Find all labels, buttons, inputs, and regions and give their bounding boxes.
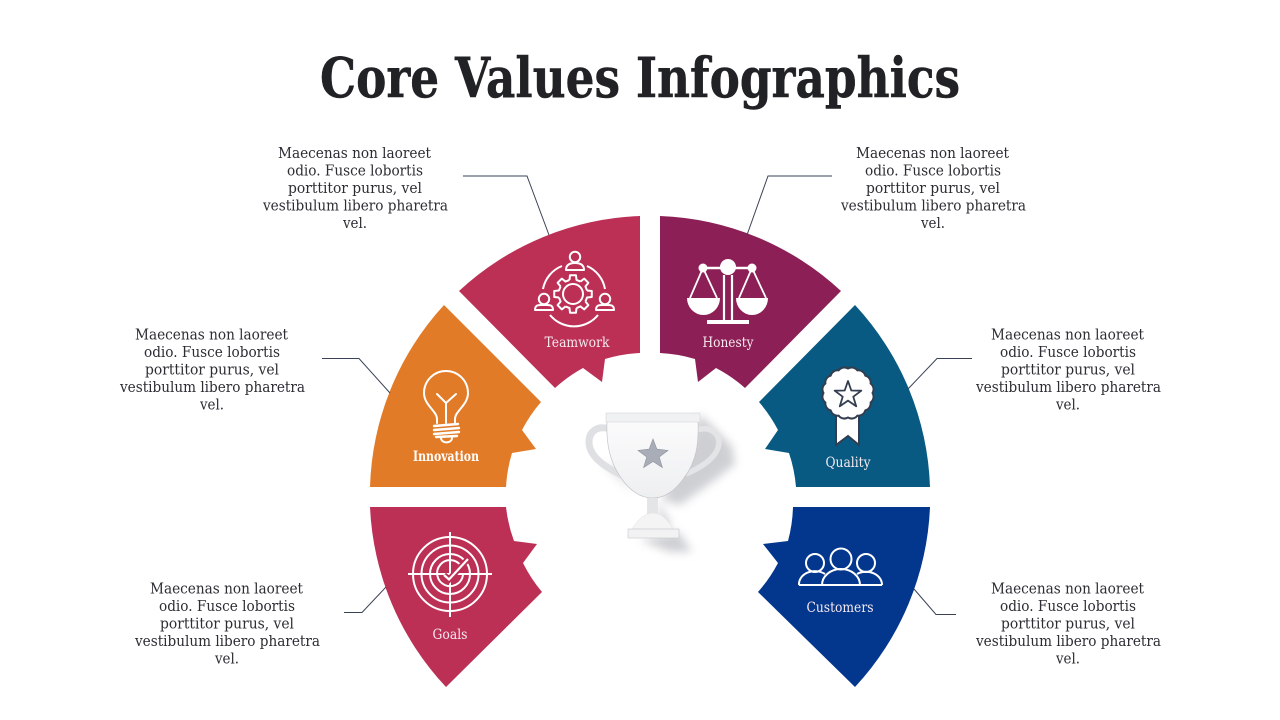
text block: Goals: vel. [214, 650, 239, 668]
text block: Quality: vestibulum libero pharetra [975, 378, 1161, 396]
icon: light bulb [424, 371, 468, 442]
text block: Honesty: vestibulum libero pharetra [840, 196, 1026, 214]
trophy rim [606, 413, 700, 422]
panel: Quality [759, 305, 930, 487]
trophy stem [647, 498, 658, 515]
label: Quality: Quality [826, 455, 871, 471]
label: Innovation: Innovation [413, 449, 479, 465]
text block: Innovation: Maecenas non laoreet [135, 326, 288, 344]
text block: Goals: vestibulum libero pharetra [134, 632, 320, 650]
text block: Honesty: Maecenas non laoreet [856, 144, 1009, 162]
panel: Goals [370, 507, 542, 687]
text block: Quality: vel. [1055, 396, 1080, 414]
trophy shadow [600, 414, 735, 552]
segment: Honesty [660, 216, 841, 388]
leader: Honesty [747, 176, 832, 235]
text block: Customers: porttitor purus, vel [1001, 614, 1135, 632]
text block: Innovation: vel. [199, 396, 224, 414]
leader: Goals [344, 587, 386, 612]
label: Teamwork: Teamwork [544, 335, 610, 351]
label: Honesty: Honesty [702, 335, 754, 351]
trophy plate [628, 529, 679, 538]
trophy cup [607, 421, 698, 498]
icon: trophy [589, 413, 735, 552]
panel: Innovation [370, 305, 541, 487]
panel: Honesty [660, 216, 841, 388]
title: Core Values Infographics [320, 45, 960, 110]
text block: Teamwork: porttitor purus, vel [288, 179, 422, 197]
text block: Goals: Maecenas non laoreet [150, 580, 303, 598]
text block: Quality: Maecenas non laoreet [991, 326, 1144, 344]
label: Goals: Goals [432, 627, 468, 643]
leader: Customers [914, 589, 956, 614]
text block: Innovation: odio. Fusce lobortis [144, 343, 280, 361]
segment: Customers [758, 507, 930, 687]
panel: Teamwork [459, 216, 640, 388]
text block: Quality [975, 326, 1161, 414]
text block: Customers: Maecenas non laoreet [991, 580, 1144, 598]
text block: Teamwork: vestibulum libero pharetra [262, 196, 448, 214]
icon: scales [687, 259, 768, 324]
text block: Customers [975, 580, 1161, 668]
text block: Honesty: vel. [920, 214, 945, 232]
text block: Goals: odio. Fusce lobortis [159, 597, 295, 615]
text block: Innovation: porttitor purus, vel [145, 360, 279, 378]
text block: Teamwork: vel. [342, 214, 367, 232]
text block: Goals [134, 580, 320, 668]
text block: Innovation [119, 326, 305, 414]
panel: Customers [758, 507, 930, 687]
text block: Honesty: porttitor purus, vel [866, 179, 1000, 197]
text block: Quality: odio. Fusce lobortis [1000, 343, 1136, 361]
trophy handles [589, 428, 624, 476]
segment: Innovation [370, 305, 541, 487]
text block: Customers: vel. [1055, 650, 1080, 668]
text block: Honesty: odio. Fusce lobortis [865, 162, 1001, 180]
trophy base [632, 513, 673, 529]
text block: Innovation: vestibulum libero pharetra [119, 378, 305, 396]
text block: Teamwork: odio. Fusce lobortis [287, 162, 423, 180]
icon: target with check [408, 532, 492, 617]
leader: Teamwork [463, 176, 549, 235]
icon: teamwork gear and people [535, 252, 614, 326]
icon: people group [799, 548, 882, 585]
text block: Teamwork [262, 144, 448, 232]
text block: Customers: vestibulum libero pharetra [975, 632, 1161, 650]
leader: Quality [908, 358, 972, 389]
segment: Goals [370, 507, 542, 687]
segment: Quality [759, 305, 930, 487]
leader: Innovation [322, 358, 390, 393]
text block: Goals: porttitor purus, vel [160, 614, 294, 632]
trophy star [638, 439, 668, 468]
text block: Customers: odio. Fusce lobortis [1000, 597, 1136, 615]
text block: Teamwork: Maecenas non laoreet [278, 144, 431, 162]
segment: Teamwork [459, 216, 640, 388]
text block: Honesty [840, 144, 1026, 232]
text block: Quality: porttitor purus, vel [1001, 360, 1135, 378]
label: Customers: Customers [806, 600, 874, 616]
icon: award ribbon [822, 367, 874, 445]
